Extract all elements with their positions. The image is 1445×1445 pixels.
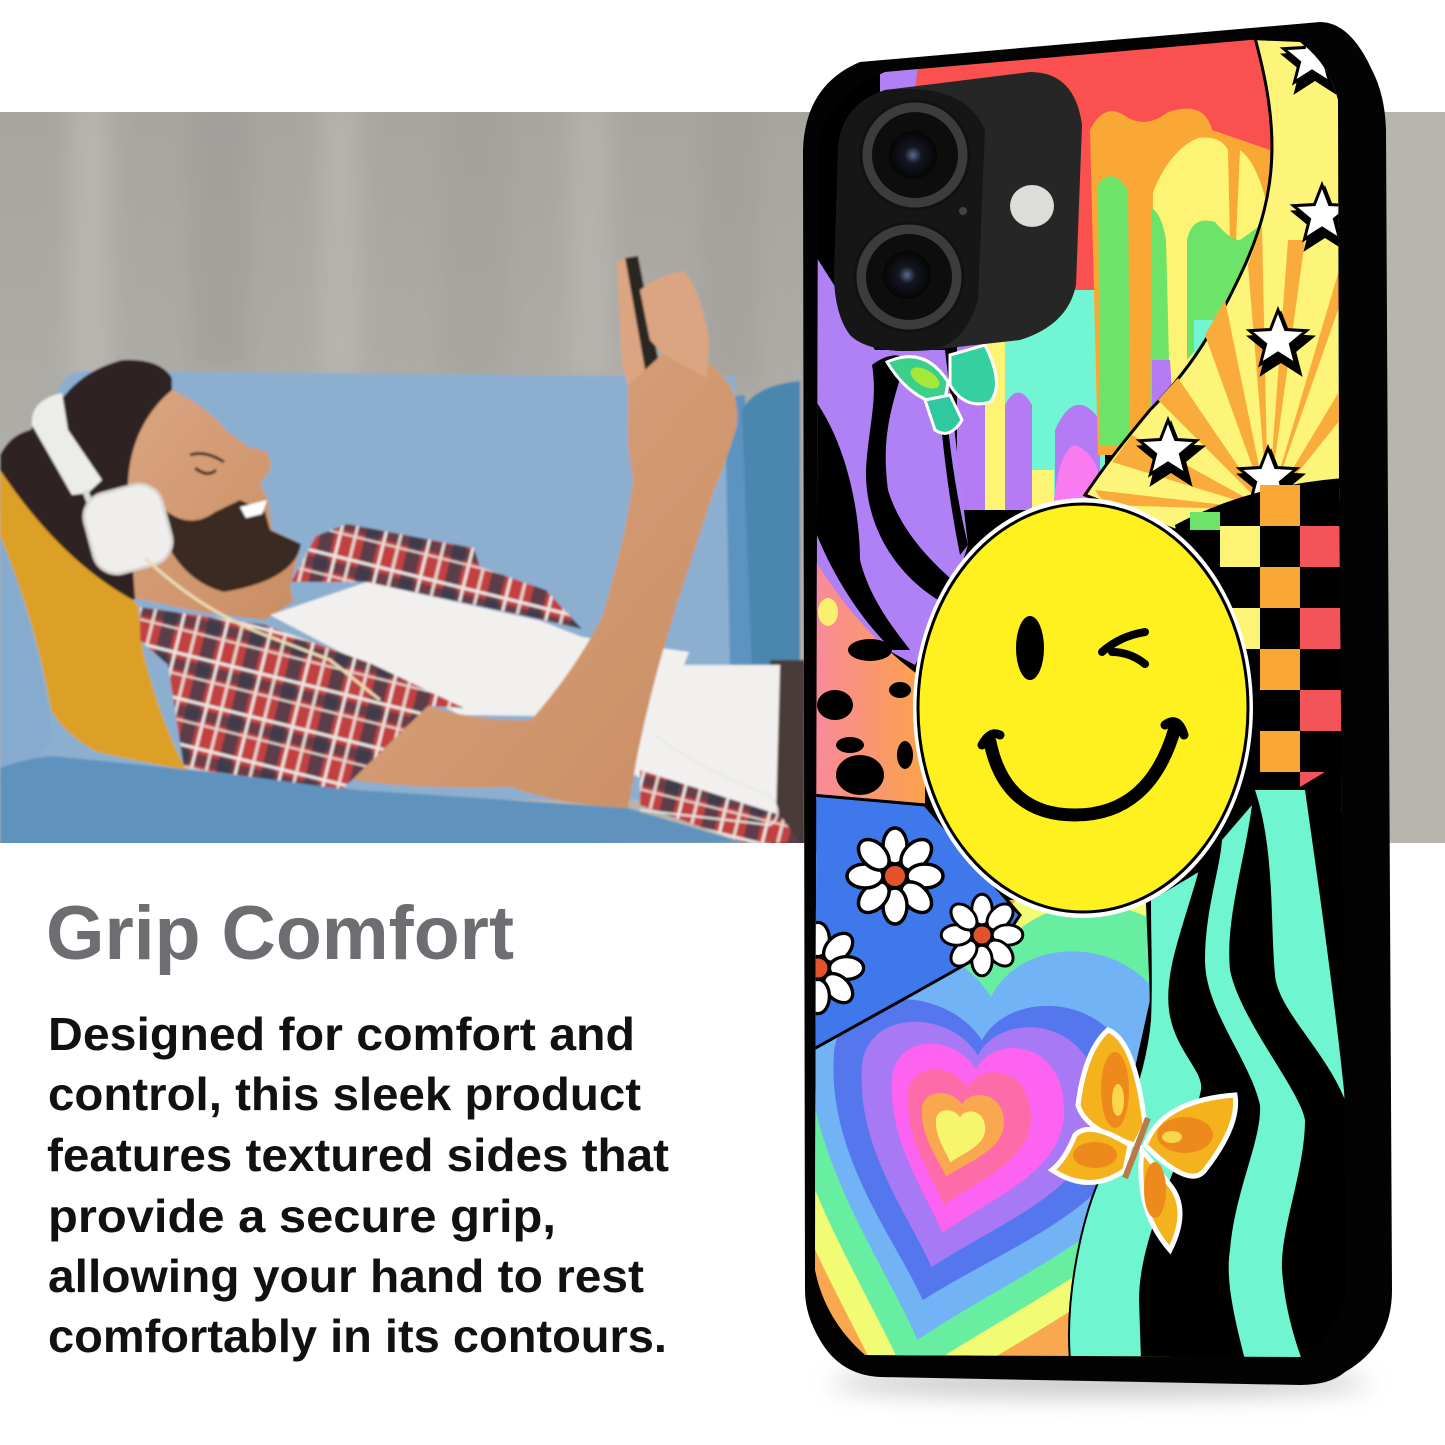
lifestyle photo: man on sofa [0, 100, 1445, 860]
leopard panel [815, 560, 925, 810]
printed artwork [815, 40, 1344, 1357]
description text block [47, 1008, 669, 1362]
purple left drip column [957, 340, 987, 510]
yellow pillow [0, 470, 186, 770]
headphones [32, 393, 380, 700]
wall [0, 100, 1445, 860]
red top [900, 40, 1270, 290]
white t-shirt [270, 582, 780, 815]
orange butterfly [1052, 1030, 1236, 1250]
hair [0, 360, 172, 600]
smile [240, 500, 267, 518]
green stripe left [1098, 176, 1130, 445]
heading: Grip Comfort: Grip Comfort [46, 891, 514, 976]
purple drips [1005, 392, 1032, 510]
stars [1136, 45, 1338, 494]
top lens [861, 101, 969, 209]
winking smiley face [913, 498, 1253, 918]
description text block: allowing your hand to rest [48, 1250, 644, 1302]
eye and brow [190, 454, 224, 474]
face and neck [128, 390, 301, 620]
purple corner [880, 69, 918, 92]
plaid shirt [140, 524, 800, 843]
blue flower panel [772, 795, 1023, 1050]
checkerboard [1175, 478, 1342, 813]
phone drop shadow [830, 1369, 1370, 1397]
paint drips [957, 109, 1270, 510]
camera module [834, 72, 1082, 351]
aqua drip [1005, 290, 1105, 510]
earphone cable [639, 803, 780, 828]
description text block: comfortably in its contours. [48, 1310, 667, 1362]
sofa [0, 371, 805, 850]
description text block: features textured sides that [47, 1129, 669, 1181]
green stripe middle [1150, 208, 1169, 408]
flash [1010, 185, 1054, 227]
case body [803, 22, 1392, 1385]
orange rays [1095, 225, 1345, 510]
beard [165, 500, 301, 592]
bottom lens [855, 223, 963, 331]
teal wavy stripes [1068, 760, 1350, 1370]
green butterfly [887, 345, 996, 433]
description text block: Designed for comfort and [48, 1008, 635, 1060]
yellow drip [1152, 138, 1266, 384]
phone case [803, 22, 1392, 1385]
purple small drip [1152, 360, 1172, 406]
description text block: provide a secure grip, [48, 1190, 556, 1242]
sun rays panel [1085, 30, 1345, 530]
phone in hand [625, 256, 658, 370]
description text block: control, this sleek product [48, 1068, 641, 1120]
aqua small drip [1194, 320, 1214, 355]
orange drip [1090, 109, 1270, 455]
purple and black wavy stripes [815, 255, 968, 665]
green drip center [1187, 220, 1265, 360]
arm and hand [352, 350, 738, 808]
microphone dot [959, 207, 967, 215]
rainbow heart [815, 853, 1170, 1356]
fingers [617, 258, 709, 385]
yellow column [985, 340, 1007, 510]
